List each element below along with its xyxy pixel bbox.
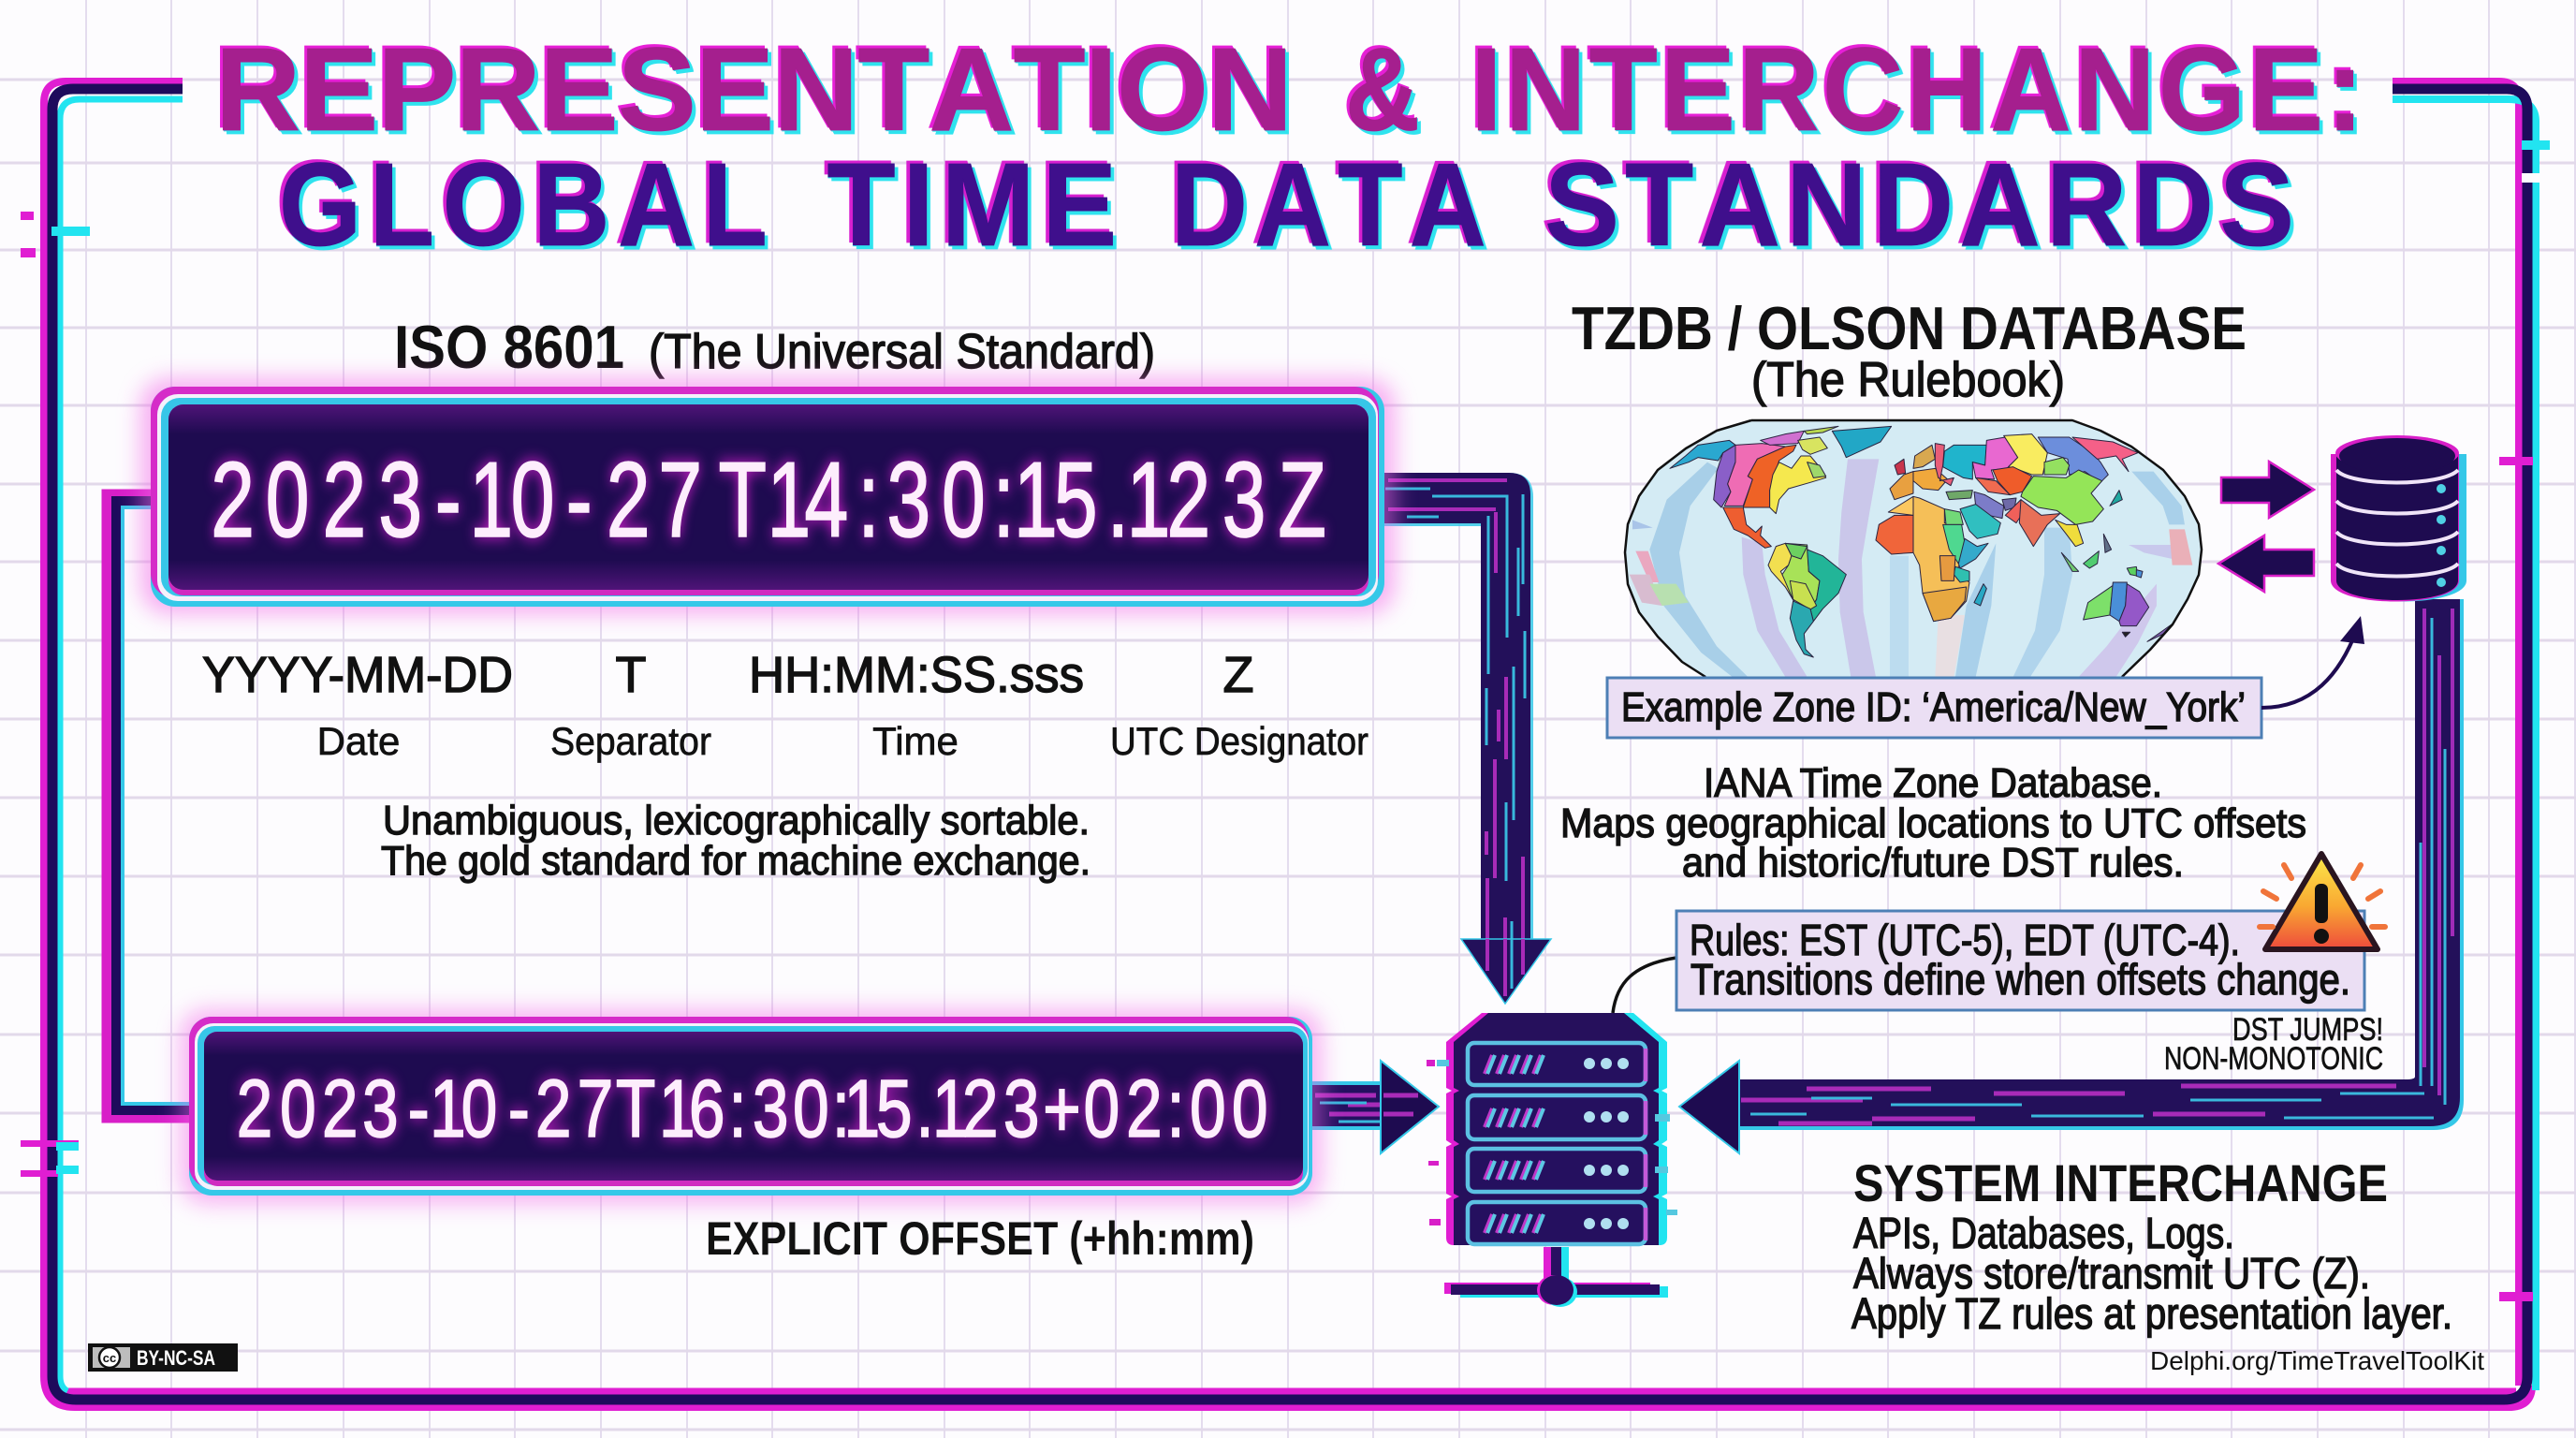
- server body silhouette layers: [1446, 1013, 1667, 1245]
- arrow: zone ID to database: [2261, 616, 2364, 708]
- heading: ISO 8601: [394, 313, 1155, 381]
- format breakdown labels: T: [616, 647, 646, 703]
- connector: rules box to server: [1613, 958, 1676, 1013]
- format breakdown labels: Z: [1222, 647, 1254, 703]
- title: INTERCHANGE:: [1471, 24, 2364, 156]
- western hemisphere: [1630, 426, 1913, 677]
- heading: TZDB / Olson database: (The Rulebook): [1751, 353, 2065, 407]
- description: ISO benefits: The gold standard for machine exchange.: [381, 838, 1090, 884]
- format breakdown labels: UTC Designator: [1110, 719, 1368, 763]
- eastern hemisphere: [1913, 434, 2192, 677]
- note: DST jumps: NON-MONOTONIC: [2164, 1041, 2383, 1077]
- arrow: database down to server: [1679, 599, 2464, 1153]
- description: IANA database: Maps geographical locations to UTC offsets: [1560, 800, 2306, 846]
- icon: database cylinder: [2331, 435, 2466, 601]
- title: STANDARDS: [1544, 139, 2294, 271]
- server drive bays: [1468, 1043, 1646, 1244]
- arrows: map to database exchange: [2218, 462, 2314, 592]
- format breakdown labels: YYYY-MM-DD: [202, 647, 513, 703]
- description: IANA database: and historic/future DST rules.: [1682, 840, 2184, 886]
- title: REPRESENTATION: [215, 23, 1293, 155]
- license badge: cc: [103, 1351, 116, 1365]
- heading: TZDB / Olson database: TZDB / OLSON DATABASE: [1572, 294, 2247, 362]
- title: &: [1345, 23, 1420, 155]
- title: GLOBAL: [279, 139, 768, 271]
- title: [215, 23, 2364, 271]
- heading: ISO 8601: (The Universal Standard): [649, 325, 1155, 379]
- text block: system interchange: APIs, Databases, Logs.: [1853, 1209, 2234, 1257]
- arrow: ISO display down to server: [1384, 473, 1551, 1004]
- format breakdown labels: Time: [872, 719, 959, 763]
- connector: left bracket between displays: [107, 494, 192, 1118]
- text block: system interchange: Apply TZ rules at presentation layer.: [1852, 1289, 2452, 1338]
- panel: ISO 8601 UTC display: [140, 378, 1395, 614]
- heading: ISO 8601: ISO 8601: [394, 313, 624, 381]
- note: DST jumps: [2164, 1012, 2383, 1077]
- license badge: [89, 1344, 237, 1371]
- title: TIME: [827, 139, 1117, 271]
- timestamp: UTC: 2023-10-27T14:30:15.123Z: [211, 441, 1326, 560]
- format breakdown labels: [202, 647, 1368, 763]
- callout: example zone ID: Example Zone ID: ‘America/New_York’: [1621, 684, 2246, 730]
- label: explicit offset: EXPLICIT OFFSET (+hh:mm): [706, 1212, 1254, 1265]
- note: DST jumps: DST JUMPS!: [2232, 1012, 2383, 1048]
- description: IANA database: IANA Time Zone Database.: [1704, 760, 2162, 806]
- panel: explicit offset display: [180, 1009, 1322, 1204]
- text block: system interchange: [1852, 1153, 2452, 1338]
- text block: system interchange: SYSTEM INTERCHANGE: [1853, 1153, 2388, 1212]
- timestamp: with offset: 2023-10-27T16:30:15.123+02:00: [237, 1064, 1268, 1154]
- description: IANA database: [1560, 760, 2306, 886]
- heading: TZDB / Olson database: [1572, 294, 2247, 407]
- arrow: offset display to server: [1312, 1061, 1439, 1153]
- credit URL: Delphi.org/TimeTravelToolKit: [2150, 1346, 2484, 1375]
- icon: server rack: [1427, 1013, 1677, 1307]
- callout: DST rules: [1676, 911, 2364, 1010]
- server base network stem: [1444, 1247, 1668, 1307]
- format breakdown labels: Date: [317, 719, 400, 763]
- title: DATA: [1171, 139, 1486, 271]
- description: ISO benefits: [381, 798, 1090, 884]
- callout: example zone ID: [1607, 678, 2261, 738]
- format breakdown labels: HH:MM:SS.sss: [749, 647, 1084, 703]
- callout: DST rules: Transitions define when offsets change.: [1690, 955, 2350, 1004]
- callout: DST rules: Rules: EST (UTC-5), EDT (UTC-4).: [1690, 916, 2240, 964]
- format breakdown labels: Separator: [550, 719, 711, 763]
- text block: system interchange: Always store/transmit UTC (Z).: [1853, 1249, 2370, 1298]
- icon: warning triangle: [2260, 854, 2385, 949]
- description: ISO benefits: Unambiguous, lexicographically sortable.: [383, 798, 1090, 844]
- license badge: BY-NC-SA: [137, 1346, 215, 1370]
- world time zone map: [1619, 418, 2209, 678]
